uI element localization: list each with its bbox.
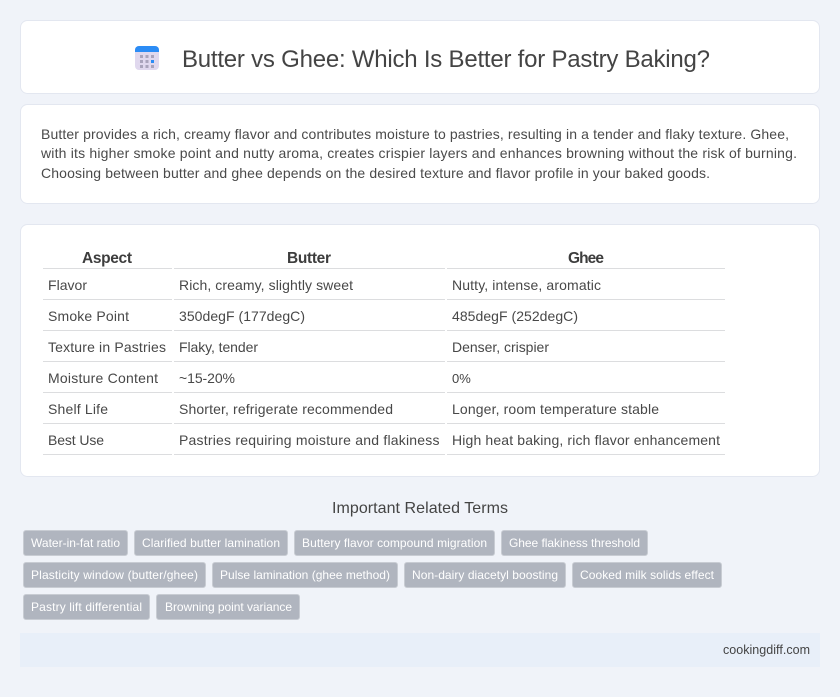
table header <box>82 250 604 267</box>
tag: pastry lift differential <box>24 594 150 620</box>
row: smoke point: 350degF (177degC) <box>179 308 305 324</box>
row: texture in pastries: Texture in Pastries <box>48 339 166 355</box>
tag: water-in-fat ratio <box>24 530 128 556</box>
tag: ghee flakiness threshold: Ghee flakiness threshold <box>509 536 640 550</box>
tag: plasticity window: Plasticity window (butter/ghee) <box>31 568 198 582</box>
row: shelf life: Longer, room temperature stable <box>452 401 659 417</box>
tag: pulse lamination <box>212 562 398 588</box>
tag: non-dairy diacetyl boosting: Non-dairy diacetyl boosting <box>412 568 558 582</box>
row: shelf life: Shelf Life <box>48 401 108 417</box>
tag: water-in-fat ratio: Water-in-fat ratio <box>31 536 120 550</box>
row: moisture content: 0% <box>452 371 471 386</box>
row: moisture content <box>48 370 471 386</box>
row: smoke point: Smoke Point <box>48 308 129 324</box>
row: moisture content: ~15-20% <box>179 370 235 386</box>
row: moisture content: Moisture Content <box>48 370 158 386</box>
row: best use: Best Use <box>48 432 104 448</box>
summary text: Choosing between butter and ghee depends on the desired texture and flavor profile in your baked goods. <box>41 165 710 181</box>
row: best use: High heat baking, rich flavor enhancement <box>452 432 720 448</box>
row: texture in pastries: Flaky, tender <box>179 339 258 355</box>
title: Butter vs Ghee: Which Is Better for Pastry Baking? <box>182 46 710 73</box>
row: shelf life: Shorter, refrigerate recommended <box>179 401 393 417</box>
tag: plasticity window <box>24 562 206 588</box>
summary text <box>40 126 797 181</box>
panel: summary <box>20 104 820 204</box>
heading: related terms: Important Related Terms <box>332 500 508 517</box>
row: smoke point: 485degF (252degC) <box>452 308 578 324</box>
icon: calendar <box>135 46 159 70</box>
related term tags <box>24 530 722 620</box>
tag: non-dairy diacetyl boosting <box>404 562 566 588</box>
panel: header <box>20 20 820 94</box>
tag: pastry lift differential: Pastry lift differential <box>31 600 142 614</box>
summary text: with its higher smoke point and nutty aroma, creates crispier layers and enhances browning without the risk of burning. <box>40 145 797 161</box>
tag: cooked milk solids effect <box>572 562 722 588</box>
tag: browning point variance: Browning point variance <box>165 600 292 614</box>
row: best use <box>48 432 720 448</box>
tag: cooked milk solids effect: Cooked milk solids effect <box>580 568 715 582</box>
table header: Ghee <box>568 250 604 267</box>
row: flavor: Flavor <box>48 277 87 293</box>
tag: clarified butter lamination: Clarified butter lamination <box>142 536 280 550</box>
row: flavor <box>48 277 601 293</box>
row: texture in pastries: Denser, crispier <box>452 339 549 355</box>
row: smoke point <box>48 308 578 324</box>
summary text: Butter provides a rich, creamy flavor and contributes moisture to pastries, resulting in a tender and flaky texture. Ghee, <box>41 126 789 142</box>
panel: comparison table <box>20 224 820 476</box>
row: shelf life <box>48 401 659 417</box>
tag: clarified butter lamination <box>134 530 288 556</box>
tag: buttery flavor compound migration: Buttery flavor compound migration <box>302 536 487 550</box>
footer <box>20 633 820 667</box>
row: flavor: Rich, creamy, slightly sweet <box>179 277 353 293</box>
tag: browning point variance <box>156 594 300 620</box>
table header: Butter <box>287 250 331 267</box>
row: flavor: Nutty, intense, aromatic <box>452 277 601 293</box>
table header: Aspect <box>82 250 132 267</box>
row: best use: Pastries requiring moisture and flakiness <box>179 432 440 448</box>
row: texture in pastries <box>48 339 549 355</box>
tag: ghee flakiness threshold <box>502 530 648 556</box>
footer source: cookingdiff.com <box>723 643 810 657</box>
tag: pulse lamination: Pulse lamination (ghee method) <box>220 568 390 582</box>
tag: buttery flavor compound migration <box>294 530 494 556</box>
